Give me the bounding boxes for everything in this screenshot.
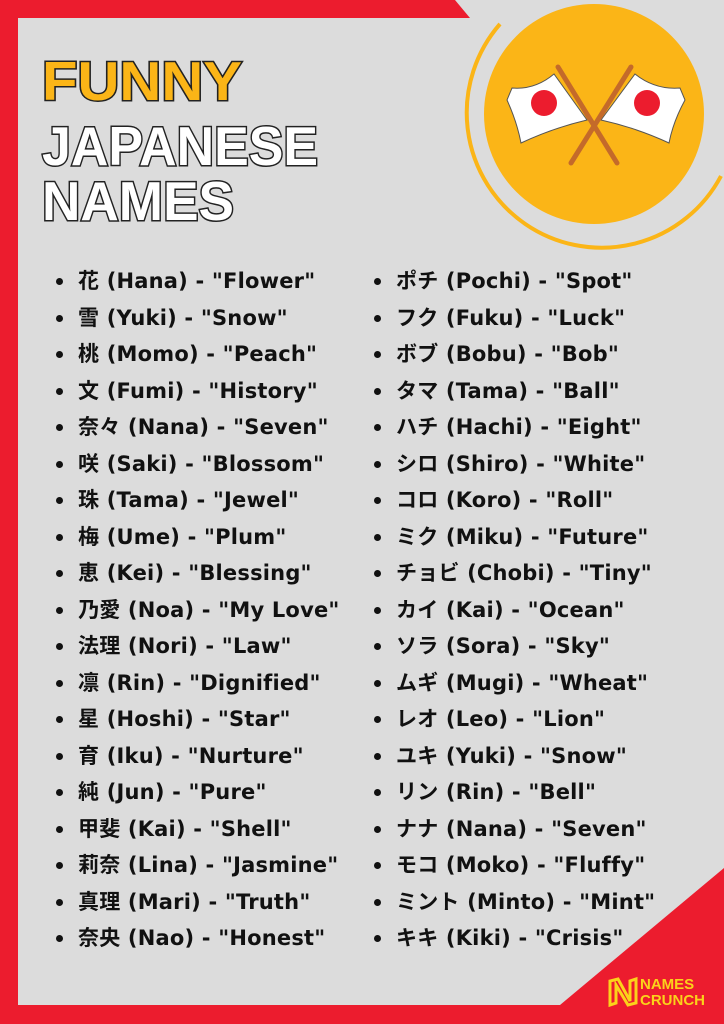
list: left column: 法理 (Nori) - "Law" <box>78 634 292 658</box>
list: right column: ポチ (Pochi) - "Spot" <box>396 269 633 293</box>
list: right column: カイ (Kai) - "Ocean" <box>396 598 625 622</box>
list: left column: 文 (Fumi) - "History" <box>78 378 318 402</box>
list: left column: 真理 (Mari) - "Truth" <box>78 890 310 914</box>
list: left column: 育 (Iku) - "Nurture" <box>78 744 304 768</box>
list: left column: 星 (Hoshi) - "Star" <box>78 707 291 731</box>
list: left column: 桃 (Momo) - "Peach" <box>78 342 317 366</box>
list: left column: 莉奈 (Lina) - "Jasmine" <box>78 853 338 877</box>
list: left column: 雪 (Yuki) - "Snow" <box>78 306 288 330</box>
title: JAPANESE <box>42 115 318 177</box>
list: left column: 甲斐 (Kai) - "Shell" <box>78 816 292 840</box>
list: right column: ユキ (Yuki) - "Snow" <box>396 744 627 768</box>
list: right column: フク (Fuku) - "Luck" <box>396 306 625 330</box>
logo: CRUNCH <box>640 992 705 1009</box>
list: right column: レオ (Leo) - "Lion" <box>396 707 605 731</box>
list: right column: リン (Rin) - "Bell" <box>396 780 596 804</box>
icon: flags circle <box>464 4 723 250</box>
list: left column: 花 (Hana) - "Flower" <box>78 269 315 293</box>
list: right column: ムギ (Mugi) - "Wheat" <box>396 670 648 694</box>
list: right column <box>374 269 655 950</box>
list: left column: 梅 (Ume) - "Plum" <box>78 524 287 548</box>
list: left column: 恵 (Kei) - "Blessing" <box>78 561 312 585</box>
list: left column: 純 (Jun) - "Pure" <box>78 780 267 804</box>
list: right column: ミク (Miku) - "Future" <box>396 524 649 548</box>
list: left column: 奈央 (Nao) - "Honest" <box>78 926 325 950</box>
list: left column: 凛 (Rin) - "Dignified" <box>78 670 321 694</box>
list: right column: モコ (Moko) - "Fluffy" <box>396 853 645 877</box>
list: right column: シロ (Shiro) - "White" <box>396 452 645 476</box>
logo <box>608 976 705 1009</box>
list: right column: ソラ (Sora) - "Sky" <box>396 634 610 658</box>
list: right column: ボブ (Bobu) - "Bob" <box>396 342 619 366</box>
list: right column: ミント (Minto) - "Mint" <box>396 890 655 914</box>
list: right column: ナナ (Nana) - "Seven" <box>396 816 647 840</box>
list: right column: チョビ (Chobi) - "Tiny" <box>396 561 652 585</box>
list: right column: ハチ (Hachi) - "Eight" <box>396 415 642 439</box>
list: right column: コロ (Koro) - "Roll" <box>396 488 613 512</box>
list: left column: 奈々 (Nana) - "Seven" <box>78 415 329 439</box>
list: left column: 乃愛 (Noa) - "My Love" <box>78 598 340 622</box>
list: left column: 咲 (Saki) - "Blossom" <box>78 452 324 476</box>
list: left column <box>56 269 340 950</box>
list: left column: 珠 (Tama) - "Jewel" <box>78 488 299 512</box>
list: right column: キキ (Kiki) - "Crisis" <box>396 926 624 950</box>
title <box>41 50 318 230</box>
list: right column: タマ (Tama) - "Ball" <box>396 378 620 402</box>
title: FUNNY <box>42 50 242 112</box>
logo: NAMES <box>640 976 694 993</box>
